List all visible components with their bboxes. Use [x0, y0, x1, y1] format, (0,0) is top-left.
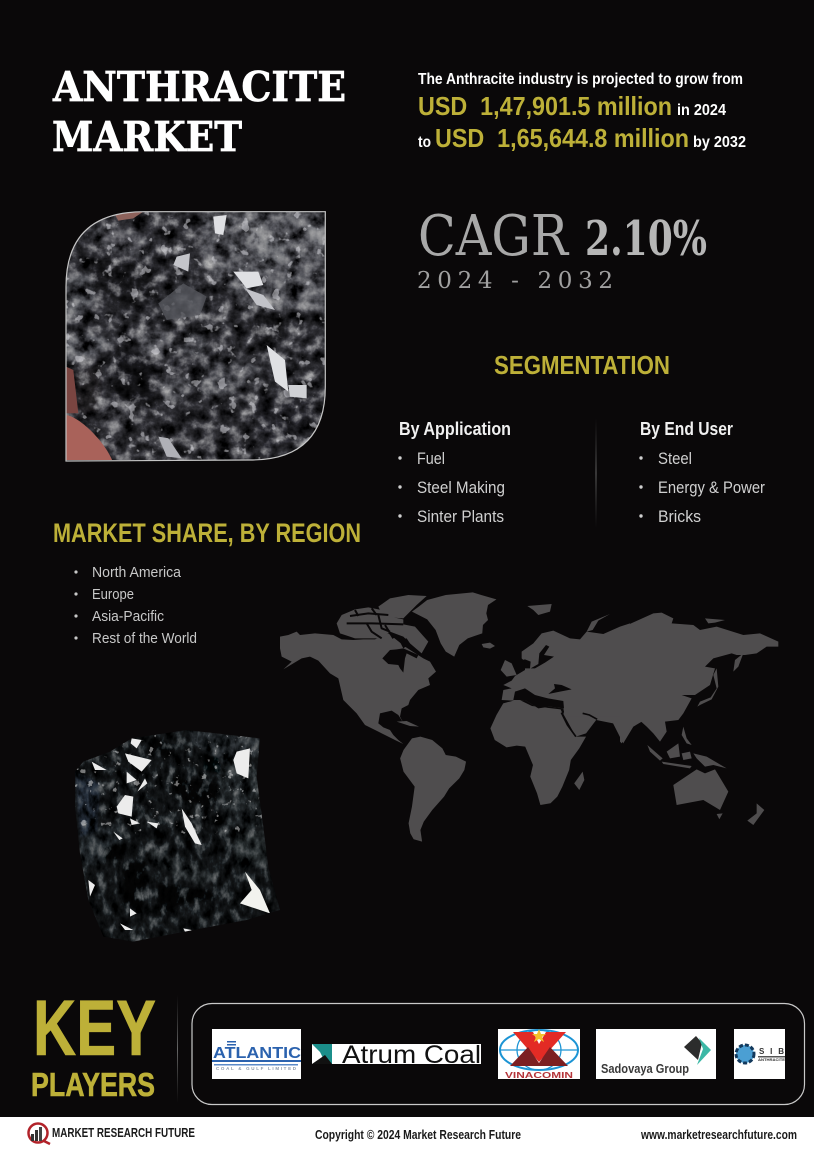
region list: Europe [92, 586, 134, 603]
heading: segmentation: SEGMENTATION [494, 350, 670, 380]
logo: Sadovaya Group: Sadovaya Group [601, 1062, 689, 1076]
rock grain [63, 210, 330, 463]
region list: Rest of the World [92, 630, 197, 647]
heading: market share by region: MARKET SHARE, BY REGION [53, 518, 361, 548]
segment list: by end user: Steel [658, 450, 692, 468]
region list: Asia-Pacific [92, 608, 164, 625]
logo: SIB Anthracite: SIB [759, 1047, 784, 1056]
CAGR figure [417, 204, 707, 294]
segment list: by end user: Bricks [658, 508, 701, 526]
CAGR figure: CAGR [418, 204, 570, 269]
logo: Atlantic: COAL & GULF LIMITED [216, 1066, 297, 1071]
skin at the edge of the photo [66, 415, 112, 460]
logo: Atlantic: ATLANTIC [213, 1045, 301, 1062]
projection text block [418, 71, 746, 153]
region list: North America [92, 564, 182, 581]
segment list: by application: Fuel [417, 450, 445, 468]
title: ANTHRACITE [52, 63, 346, 111]
logo: Atlantic [212, 1029, 301, 1079]
segment list: by application [398, 418, 511, 526]
world map [280, 592, 778, 842]
rock grain [70, 727, 287, 947]
glints [63, 210, 330, 463]
projection text block: The Anthracite industry is projected to grow from [418, 71, 743, 88]
coal rock illustration [70, 727, 287, 947]
logo: SIB Anthracite: ANTHRACITE [758, 1058, 786, 1062]
projection text block: by 2032 [693, 134, 746, 151]
segment list: by end user [639, 418, 765, 526]
photo: crushed anthracite [63, 210, 330, 463]
logo: Vinacomin [498, 1029, 580, 1080]
projection text block: USD 1,47,901.5 million [418, 91, 672, 121]
projection text block: to [418, 134, 431, 151]
region list [74, 564, 197, 647]
photo border [66, 212, 325, 461]
title [52, 63, 346, 161]
footer band: MARKET RESEARCH FUTURE [52, 1126, 195, 1140]
heading: key players: KEY [33, 983, 156, 1072]
segment list: by application: Sinter Plants [417, 508, 504, 526]
key players panel [192, 1004, 804, 1104]
logo: market research future [28, 1124, 50, 1144]
projection text block: in 2024 [677, 102, 726, 119]
logo: Atrum Coal: Atrum Coal [342, 1041, 481, 1069]
CAGR figure: 2.10% [585, 211, 707, 267]
logo: Vinacomin: VINACOMIN [505, 1070, 573, 1080]
segment list: by application: Steel Making [417, 479, 505, 497]
rock glints [75, 734, 262, 834]
logo: Sadovaya Group [596, 1029, 716, 1079]
title: MARKET [52, 113, 242, 161]
projection text block: USD 1,65,644.8 million [435, 123, 689, 153]
segment list: by end user: Energy & Power [658, 479, 765, 497]
logo: SIB Anthracite [734, 1029, 786, 1079]
heading: key players: PLAYERS [31, 1066, 155, 1103]
segment list: by end user: By End User [640, 418, 733, 439]
CAGR figure: 2024 - 2032 [417, 268, 613, 294]
footer band [0, 1117, 814, 1150]
segment list: by application: By Application [399, 418, 511, 439]
heading: key players [31, 983, 156, 1103]
footer band: Copyright © 2024 Market Research Future [315, 1128, 521, 1142]
